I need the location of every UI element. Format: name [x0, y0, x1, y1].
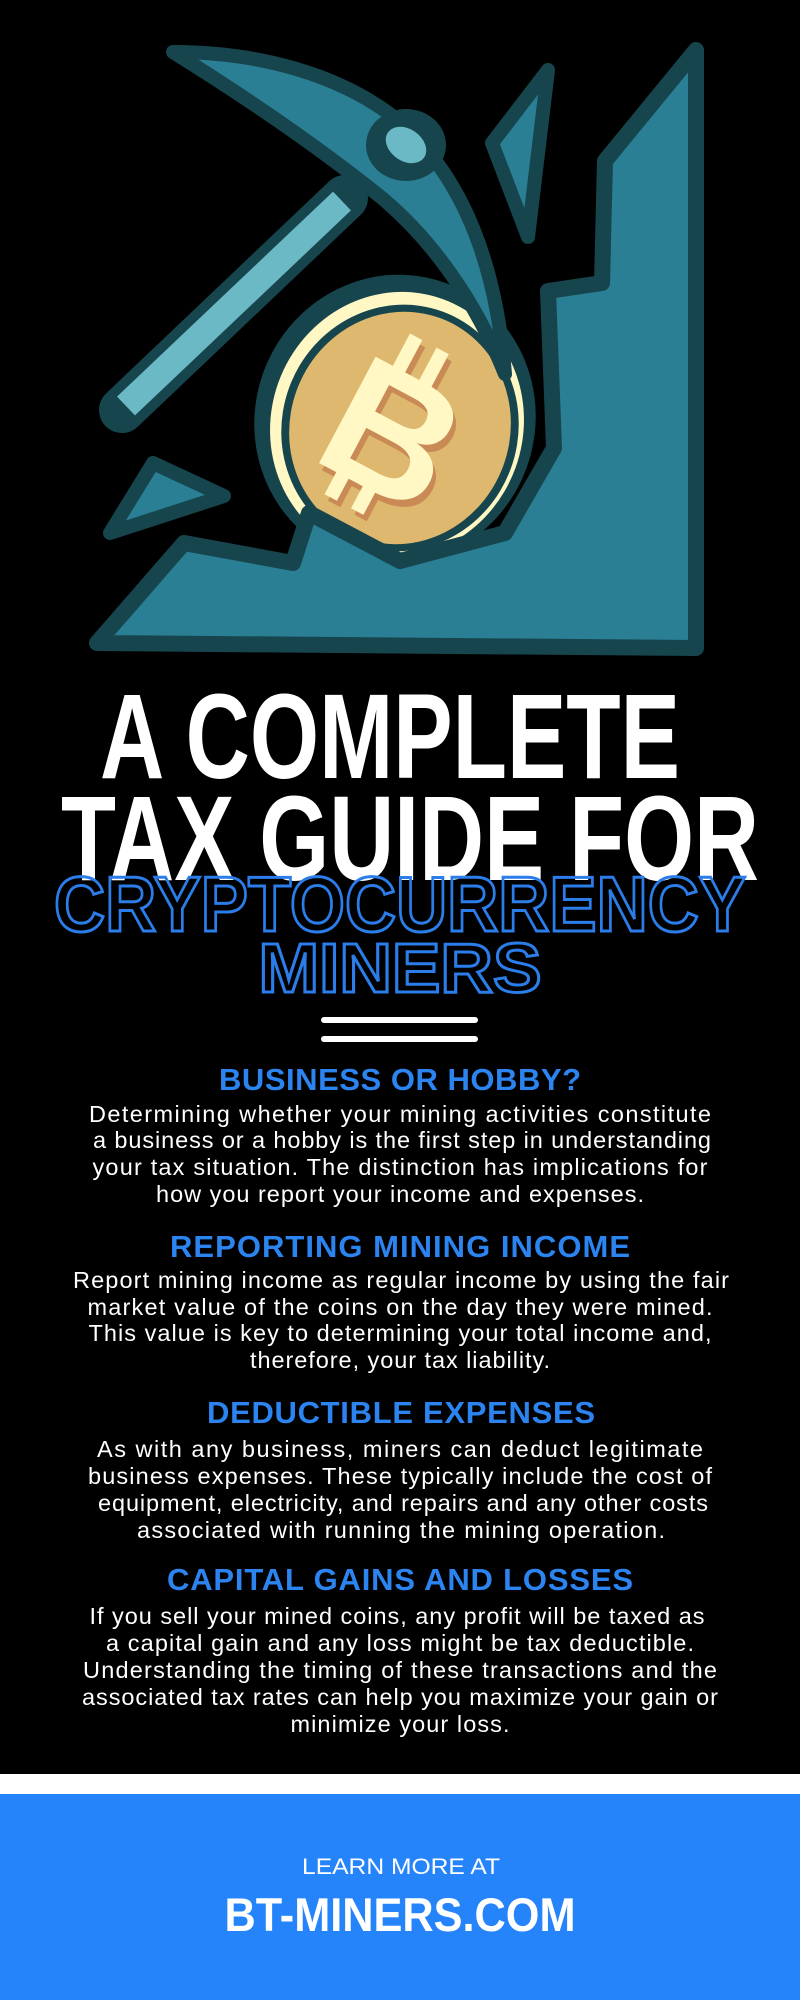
section: business or hobby: Determining whether your mining activities constitute: [89, 1101, 711, 1127]
section: reporting mining income: Report mining income as regular income by using the fair: [73, 1267, 729, 1293]
section: deductible expenses: business expenses. These typically include the cost of: [88, 1463, 712, 1489]
section: deductible expenses: equipment, electricity, and repairs and any other costs: [98, 1490, 708, 1516]
section: capital gains and losses: associated tax rates can help you maximize your gain or: [82, 1684, 718, 1710]
section: reporting mining income: This value is key to determining your total income and,: [88, 1320, 712, 1346]
icon: shard left: [110, 463, 224, 533]
icon: shard right: [492, 70, 548, 237]
illustration: pickaxe mining bitcoin: [97, 50, 696, 648]
title: [54, 668, 759, 1007]
icon: bitcoin coin: [214, 235, 576, 605]
section: deductible expenses: DEDUCTIBLE EXPENSES: [207, 1395, 595, 1430]
icon: mountain rock: [97, 50, 696, 648]
section: capital gains and losses: [82, 1562, 718, 1737]
section: deductible expenses: As with any business, miners can deduct legitimate: [97, 1436, 703, 1462]
icon: pickaxe: [122, 52, 505, 410]
section: reporting mining income: therefore, your tax liability.: [250, 1347, 550, 1373]
section: capital gains and losses: minimize your loss.: [290, 1711, 510, 1737]
section: business or hobby: your tax situation. The distinction has implications for: [92, 1154, 708, 1180]
section: deductible expenses: associated with running the mining operation.: [137, 1517, 665, 1543]
icon: bitcoin coin: B: [294, 326, 497, 558]
section: business or hobby: how you report your income and expenses.: [156, 1181, 644, 1207]
section: business or hobby: BUSINESS OR HOBBY?: [219, 1062, 581, 1097]
title: MINERS: [258, 929, 542, 1007]
section: capital gains and losses: Understanding the timing of these transactions and the: [83, 1657, 717, 1683]
title: CRYPTOCURRENCY: [54, 860, 746, 948]
footer: BT-MINERS.COM: [224, 1888, 576, 1941]
section: business or hobby: a business or a hobby is the first step in understanding: [93, 1127, 711, 1153]
section: reporting mining income: REPORTING MINING INCOME: [170, 1229, 630, 1264]
footer: LEARN MORE AT: [302, 1854, 500, 1879]
footer: [0, 1794, 800, 2000]
section: business or hobby: [89, 1062, 711, 1207]
section: reporting mining income: [73, 1229, 729, 1373]
icon: bitcoin coin: B: [291, 319, 494, 550]
section: capital gains and losses: If you sell your mined coins, any profit will be taxed as: [90, 1603, 705, 1629]
section: capital gains and losses: CAPITAL GAINS AND LOSSES: [167, 1562, 633, 1597]
section: reporting mining income: market value of the coins on the day they were mined.: [88, 1294, 712, 1320]
section: capital gains and losses: a capital gain and any loss might be tax deductible.: [106, 1630, 694, 1656]
section: deductible expenses: [88, 1395, 712, 1543]
